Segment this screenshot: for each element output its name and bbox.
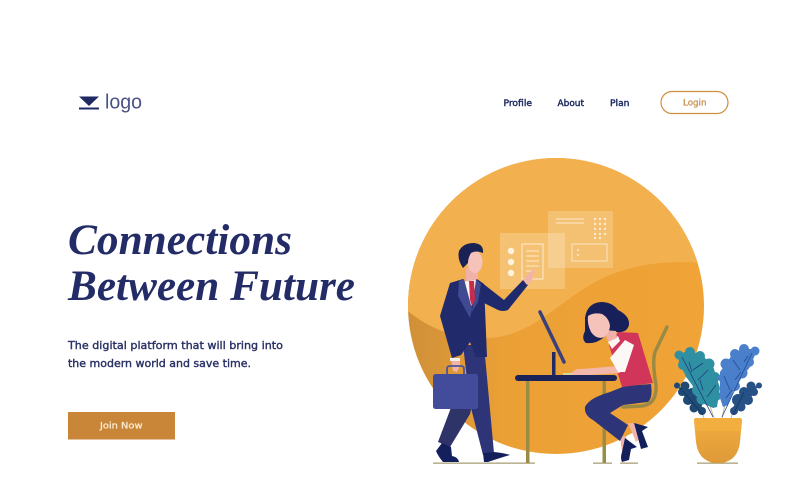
chair [623,327,667,407]
neck [604,330,617,342]
briefcase [433,366,478,409]
hand and cuff [451,358,460,372]
forearm [572,366,620,375]
front shoe [483,452,510,462]
near foot and shoe [620,436,626,452]
monitor [540,312,564,362]
vest [609,332,653,387]
logo [79,92,142,114]
subtitle text [67,339,283,370]
tie [469,281,475,306]
login button [661,92,728,114]
stems [699,400,735,418]
back hair [583,302,629,343]
join now button: Join Now [99,422,142,432]
leaf veins [682,357,716,417]
back leg [438,405,472,447]
title: Between Future [67,263,355,310]
lapels [458,279,481,318]
sleeve [610,340,634,372]
woman at desk [572,302,653,462]
man with briefcase [433,243,536,462]
neck and head [466,268,478,284]
nav: About: About [558,99,584,109]
subtitle text: The digital platform that will bring into [67,339,283,352]
ground lines [433,462,738,464]
pot [694,418,742,463]
floating screens [500,211,613,289]
nav: Plan: Plan [610,99,630,109]
potted plant [674,344,762,463]
login button: Login [683,98,706,108]
pointing hand [523,267,536,285]
title [67,217,355,310]
collar [608,336,620,349]
dark left leaf [674,382,706,415]
back shoe [436,443,459,462]
light wave [408,158,698,338]
jacket [440,279,487,358]
navigation [504,99,630,109]
illustration backdrop circle [400,150,710,454]
icon: logo funnel [79,96,99,110]
far foot and shoe [628,423,641,442]
front leg [463,345,494,455]
desk [515,312,617,463]
join now button [68,412,175,440]
hair [458,243,483,268]
shirt [462,280,478,314]
logo wordmark: logo [105,92,142,114]
blue leaf [718,344,760,407]
desk top [515,375,617,381]
panel: front screen [500,233,565,289]
dark right leaf [730,382,762,415]
teal leaf [674,347,721,408]
face [588,313,610,338]
landing page infographic [68,90,762,464]
nav: Profile: Profile [504,99,532,109]
title: Connections [68,217,292,264]
pointing arm [481,279,528,311]
legs [585,384,652,441]
panel: back screen [548,211,613,268]
keyboard [563,373,589,375]
desk legs [526,380,530,463]
subtitle text: the modern world and save time. [68,357,251,370]
